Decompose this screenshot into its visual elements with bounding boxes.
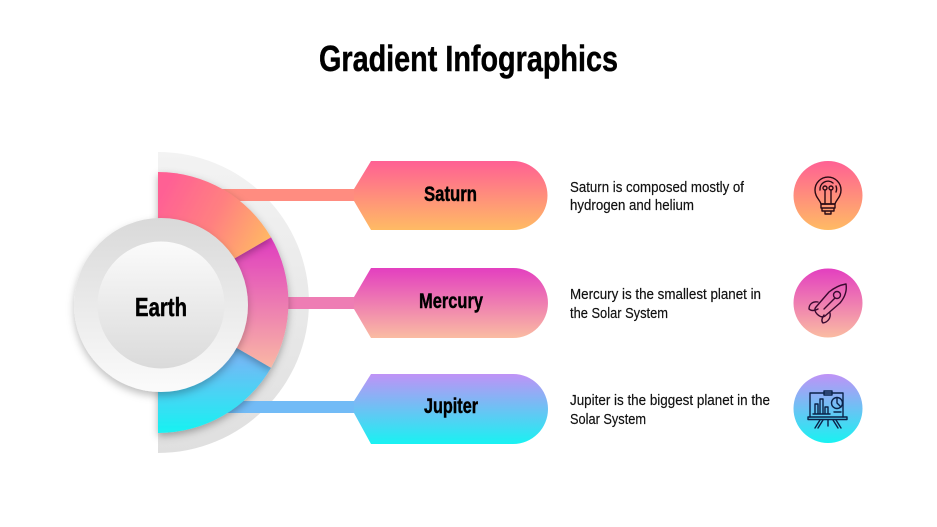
pill: Jupiter xyxy=(354,374,548,444)
pill: Saturn xyxy=(354,161,548,230)
disc: inner core xyxy=(98,242,224,368)
label: Earth: Earth xyxy=(135,292,187,322)
segment: cyan xyxy=(158,302,271,433)
segment: orange xyxy=(158,172,271,302)
text: Saturn description: hydrogen and helium xyxy=(570,197,694,214)
connector: Jupiter xyxy=(225,401,360,413)
title: Gradient Infographics xyxy=(319,38,618,79)
text: Jupiter description xyxy=(570,392,770,428)
segment: magenta xyxy=(158,237,288,368)
text: Mercury description: Mercury is the smallest planet in xyxy=(570,286,761,303)
disc: outer rim xyxy=(74,218,248,392)
pill: Saturn: Saturn xyxy=(424,183,477,206)
text: Mercury description xyxy=(570,286,761,322)
outer grey semicircle xyxy=(158,152,309,453)
text: Jupiter description: Solar System xyxy=(570,411,646,428)
pill: Mercury: Mercury xyxy=(419,290,483,313)
connector: Saturn xyxy=(215,189,360,201)
diagram: Earth semicircle xyxy=(74,152,360,453)
pill: Jupiter: Jupiter xyxy=(424,395,478,418)
text: Mercury description: the Solar System xyxy=(570,305,668,322)
text: Jupiter description: Jupiter is the biggest planet in the xyxy=(570,392,770,409)
text: Saturn description: Saturn is composed mostly of xyxy=(570,179,745,196)
pill: Mercury xyxy=(354,268,548,338)
icon: light bulb xyxy=(794,161,862,230)
icon: presentation board xyxy=(794,374,862,443)
icon: rocket xyxy=(794,268,862,338)
connector: Mercury xyxy=(280,297,360,309)
text: Saturn description xyxy=(570,179,745,214)
